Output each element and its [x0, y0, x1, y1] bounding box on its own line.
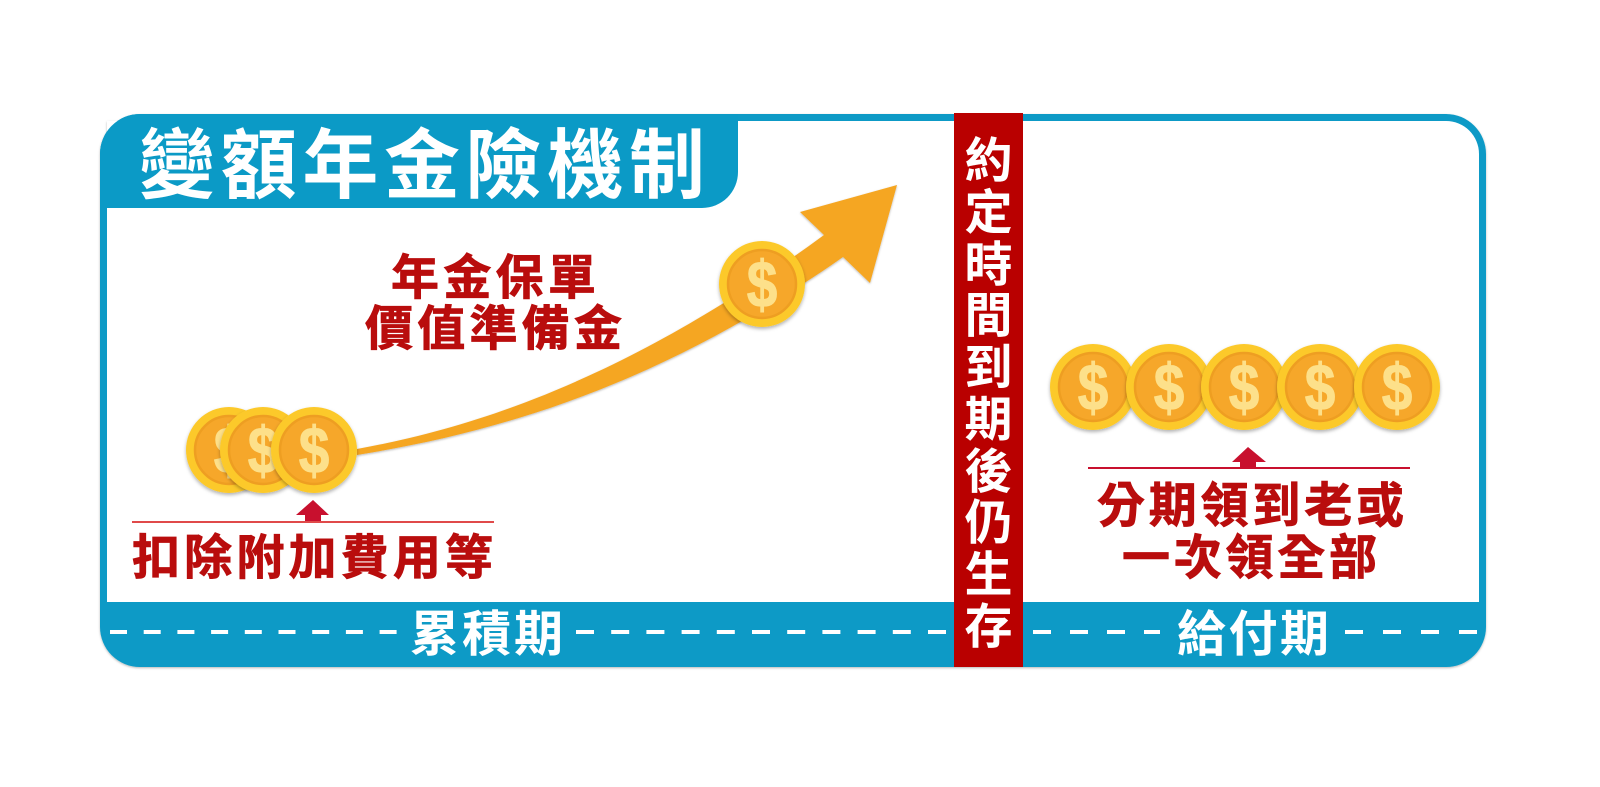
label: payout options: 分期領到老或	[1097, 480, 1404, 533]
panel: vertical red divider: 生	[964, 549, 1013, 602]
label: policy value reserve: 年金保單	[391, 252, 596, 305]
panel: vertical red divider: 間	[964, 290, 1013, 343]
panel: vertical red divider: 到	[964, 342, 1013, 395]
band label: accumulation period: 累積期	[410, 608, 563, 662]
coin stack: accumulation start: $	[248, 413, 278, 487]
panel: vertical red divider	[954, 113, 1023, 667]
coin stack: accumulation start: $	[299, 413, 329, 487]
arrow and rule: deductions	[132, 500, 494, 523]
panel: vertical red divider: 時	[964, 239, 1013, 292]
panel: vertical red divider: 定	[964, 187, 1013, 240]
coin row: payout: $	[1229, 350, 1259, 424]
coin row: payout: $	[1382, 350, 1412, 424]
coin row: payout: $	[1305, 350, 1335, 424]
coin row: payout	[1050, 344, 1440, 430]
label: payout options: 一次領全部	[1122, 532, 1377, 585]
panel: vertical red divider: 約	[964, 135, 1013, 188]
coin: on arrow: $	[747, 247, 777, 321]
panel: vertical red divider: 期	[964, 394, 1013, 447]
panel: vertical red divider: 仍	[964, 497, 1013, 550]
coin: on arrow	[719, 241, 805, 327]
label: payout options	[1097, 480, 1404, 585]
coin row: payout: $	[1078, 350, 1108, 424]
label: deductions: 扣除附加費用等	[132, 532, 493, 585]
arrow and rule: payout	[1088, 447, 1410, 469]
band label: payout period: 給付期	[1177, 608, 1329, 662]
coin stack: accumulation start: $	[214, 413, 244, 487]
panel: vertical red divider: 後	[964, 446, 1013, 499]
growth arrow	[357, 185, 897, 455]
heading tab: 變額年金險機制: 變額年金險機制	[139, 124, 705, 209]
label: policy value reserve	[365, 252, 622, 356]
label: policy value reserve: 價值準備金	[365, 303, 622, 356]
coin row: payout: $	[1154, 350, 1184, 424]
coin stack: accumulation start	[186, 407, 357, 493]
panel: vertical red divider: 存	[964, 601, 1013, 654]
panel: mechanism frame	[100, 114, 1486, 667]
